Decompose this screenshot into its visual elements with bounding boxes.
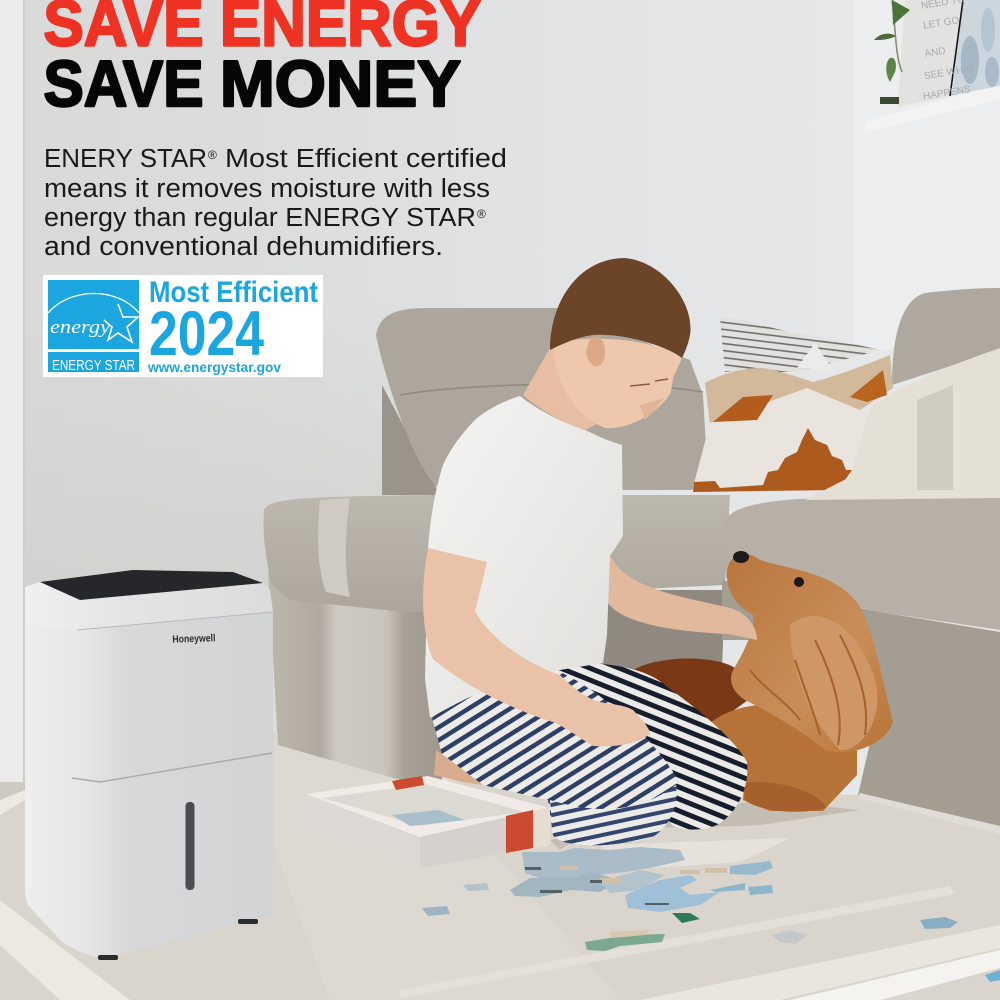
frame text: HAPPENS <box>922 84 972 103</box>
title: MONEY <box>220 47 461 120</box>
energy star badge <box>43 275 323 377</box>
front leg <box>432 672 677 845</box>
sofa front <box>268 570 442 782</box>
control panel <box>40 570 263 600</box>
scattered pieces <box>730 861 773 875</box>
pillows <box>693 318 1000 500</box>
dehumidifier <box>25 570 273 960</box>
floor <box>0 735 1000 1000</box>
front arm <box>423 548 650 746</box>
striped pillow <box>720 318 880 372</box>
foot <box>434 750 490 786</box>
knit pillow <box>705 355 893 425</box>
description text: means it removes moisture with less <box>44 175 490 203</box>
dog <box>633 551 893 812</box>
frame text: SEE WHAT <box>923 63 976 82</box>
description text <box>44 145 507 261</box>
puzzle pieces <box>422 847 1000 982</box>
sofa <box>263 288 1000 834</box>
sofa back cushions <box>382 385 440 495</box>
description text: Most Efficient certified <box>225 145 507 173</box>
face <box>553 339 682 428</box>
frame text: LET GO <box>922 15 960 32</box>
water level window <box>186 802 194 890</box>
description text: and conventional dehumidifiers. <box>44 233 443 261</box>
puzzle box <box>306 776 550 868</box>
description text: ® <box>208 148 217 162</box>
frame text: AND <box>924 46 946 60</box>
back leg <box>547 663 747 830</box>
brand label: Honeywell <box>172 632 216 646</box>
plant <box>874 0 910 104</box>
sofa seat <box>263 495 730 612</box>
right white pillow <box>805 348 1000 500</box>
white patterned pillow <box>693 388 867 490</box>
energy star badge: 2024 <box>149 299 264 369</box>
wall shelf with frames and plant <box>865 0 1000 132</box>
puzzle cluster <box>510 847 720 912</box>
energy star badge: Most Efficient <box>149 276 318 309</box>
feet <box>98 955 118 960</box>
shirt <box>425 396 623 718</box>
neck <box>523 348 620 430</box>
icon: star <box>104 304 138 342</box>
boy <box>423 258 757 845</box>
energy star badge: energy <box>50 317 111 338</box>
title <box>44 0 481 120</box>
frame text <box>908 0 980 103</box>
description text: ® <box>477 207 486 221</box>
energy star badge: www.energystar.gov <box>147 360 281 375</box>
hair <box>550 258 691 358</box>
description text: ENERY STAR <box>44 145 207 173</box>
title: SAVE <box>44 47 204 120</box>
energy star badge: ENERGY STAR <box>52 357 135 374</box>
description text: energy than regular ENERGY STAR <box>44 204 476 232</box>
back arm <box>606 555 757 640</box>
